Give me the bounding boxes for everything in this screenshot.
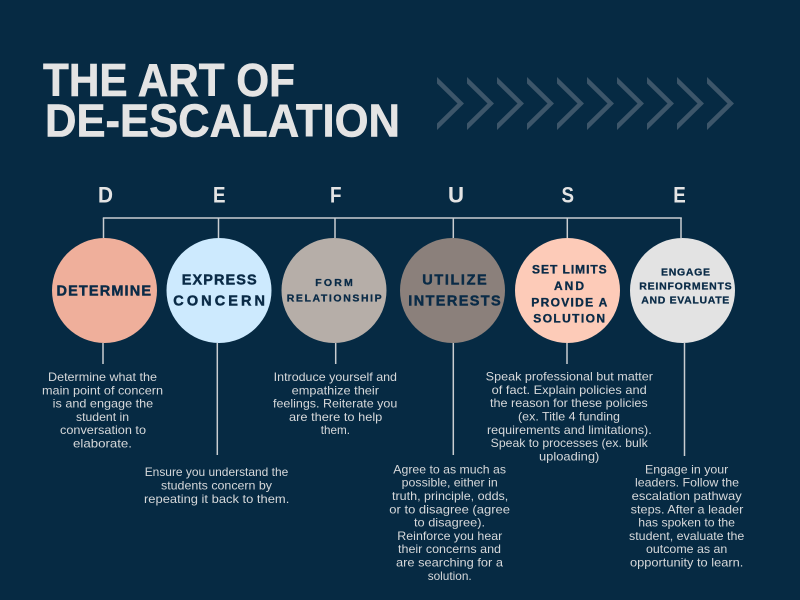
heading: engage reinforcements — [639, 266, 732, 306]
connector above circle E2 — [680, 218, 682, 238]
title — [43, 54, 400, 147]
description: set limits: Speak to processes (ex. bulk — [491, 436, 649, 450]
description: determine: is and engage the — [53, 396, 154, 410]
letter E: E — [213, 182, 226, 208]
description: engage reinforcements: opportunity to learn. — [630, 556, 743, 570]
step D: determine — [42, 182, 163, 450]
description: express concern: Ensure you understand the — [145, 465, 289, 479]
description: engage reinforcements: has spoken to the — [638, 516, 735, 530]
description: determine: main point of concern — [42, 384, 163, 398]
heading: form relationship: FORM — [315, 277, 353, 289]
circle: set limits — [515, 238, 620, 343]
description: engage reinforcements: steps. After a leader — [631, 502, 743, 516]
connector below circle E — [216, 343, 218, 455]
connector below circle U — [452, 343, 454, 455]
heading: set limits — [531, 262, 608, 326]
description: utilize interests: are searching for a — [396, 556, 503, 570]
heading: engage reinforcements: REINFORMENTS — [639, 280, 732, 292]
heading: engage reinforcements: ENGAGE — [661, 266, 710, 278]
description: set limits: of fact. Explain policies and — [492, 383, 647, 397]
description: determine — [42, 370, 163, 450]
title: DE-ESCALATION — [45, 95, 400, 147]
description: engage reinforcements: outcome as an — [646, 542, 727, 556]
circle: determine — [52, 238, 157, 343]
circle: engage reinforcements — [630, 238, 735, 343]
description: utilize interests: truth, principle, odds, — [392, 489, 508, 503]
connector above circle F — [334, 218, 336, 238]
description: utilize interests: solution. — [428, 569, 472, 583]
description: utilize interests: possible, either in — [402, 476, 498, 490]
description: form relationship: them. — [321, 423, 350, 437]
description: engage reinforcements: escalation pathway — [632, 489, 742, 503]
description: utilize interests: Agree to as much as — [393, 462, 506, 476]
step E: engage reinforcements — [629, 182, 745, 570]
step U: utilize interests — [389, 182, 510, 583]
step F: form relationship — [273, 182, 397, 437]
heading: express concern — [173, 272, 265, 310]
heading: express concern: EXPRESS — [182, 272, 257, 288]
letter E: E — [673, 182, 686, 208]
description: engage reinforcements: Engage in your — [645, 462, 728, 476]
description: determine: Determine what the — [48, 370, 157, 384]
description: utilize interests — [389, 462, 510, 583]
connector below circle S — [566, 343, 568, 364]
circle: form relationship — [282, 238, 386, 343]
description: determine: student in — [76, 410, 129, 424]
horizontal connector bar — [103, 217, 682, 219]
description: express concern: students concern by — [161, 478, 272, 492]
description: express concern: repeating it back to them. — [144, 492, 289, 506]
description: set limits: the reason for these policies — [490, 396, 648, 410]
description: express concern — [144, 465, 289, 506]
heading: set limits: SOLUTION — [533, 312, 605, 326]
description: form relationship: are there to help — [289, 410, 383, 424]
heading: set limits: AND — [554, 279, 584, 293]
heading: form relationship: RELATIONSHIP — [287, 293, 382, 305]
description: set limits — [486, 370, 653, 464]
description: form relationship: Introduce yourself and — [274, 370, 397, 384]
step E: express concern — [144, 182, 289, 506]
connector above circle E — [218, 218, 220, 238]
description: form relationship: empathize their — [292, 384, 379, 398]
connector below circle D — [102, 343, 104, 364]
description: form relationship: feelings. Reiterate you — [273, 396, 397, 410]
heading: utilize interests: UTILIZE — [422, 273, 487, 289]
heading: express concern: CONCERN — [173, 294, 265, 310]
step S: set limits — [486, 182, 653, 464]
heading: engage reinforcements: AND EVALUATE — [641, 294, 729, 306]
description: set limits: (ex. Title 4 funding — [518, 410, 620, 424]
description: utilize interests: their concerns and — [398, 542, 501, 556]
description: engage reinforcements — [629, 462, 745, 570]
letter U: U — [448, 182, 464, 208]
description: determine: elaborate. — [73, 436, 132, 450]
heading: determine: DETERMINE — [56, 284, 151, 300]
description: engage reinforcements: student, evaluate the — [629, 529, 745, 543]
heading: set limits: PROVIDE A — [531, 295, 608, 309]
circle: express concern — [166, 238, 272, 343]
heading: form relationship — [287, 277, 382, 305]
decorative chevron arrows — [437, 77, 734, 130]
description: utilize interests: or to disagree (agree — [389, 502, 510, 516]
connector above circle S — [566, 218, 568, 238]
connector above circle U — [452, 218, 454, 238]
title: THE ART OF — [43, 54, 295, 106]
heading: utilize interests: INTERESTS — [408, 293, 501, 309]
description: utilize interests: to disagree). — [414, 516, 485, 530]
description: form relationship — [273, 370, 397, 437]
heading: set limits: SET LIMITS — [532, 262, 607, 276]
description: utilize interests: Reinforce you hear — [397, 529, 502, 543]
description: determine: conversation to — [60, 423, 146, 437]
connector below circle F — [335, 343, 337, 364]
description: set limits: Speak professional but matter — [486, 370, 653, 384]
description: set limits: uploading) — [539, 450, 599, 464]
heading: utilize interests — [408, 273, 501, 309]
description: set limits: requirements and limitations). — [487, 423, 652, 437]
letter S: S — [562, 182, 574, 208]
connector above circle D — [102, 218, 104, 238]
letter F: F — [330, 182, 342, 208]
letter D: D — [98, 182, 113, 208]
circle: utilize interests — [400, 238, 505, 343]
description: engage reinforcements: leaders. Follow the — [635, 476, 739, 490]
connector below circle E2 — [684, 343, 686, 456]
